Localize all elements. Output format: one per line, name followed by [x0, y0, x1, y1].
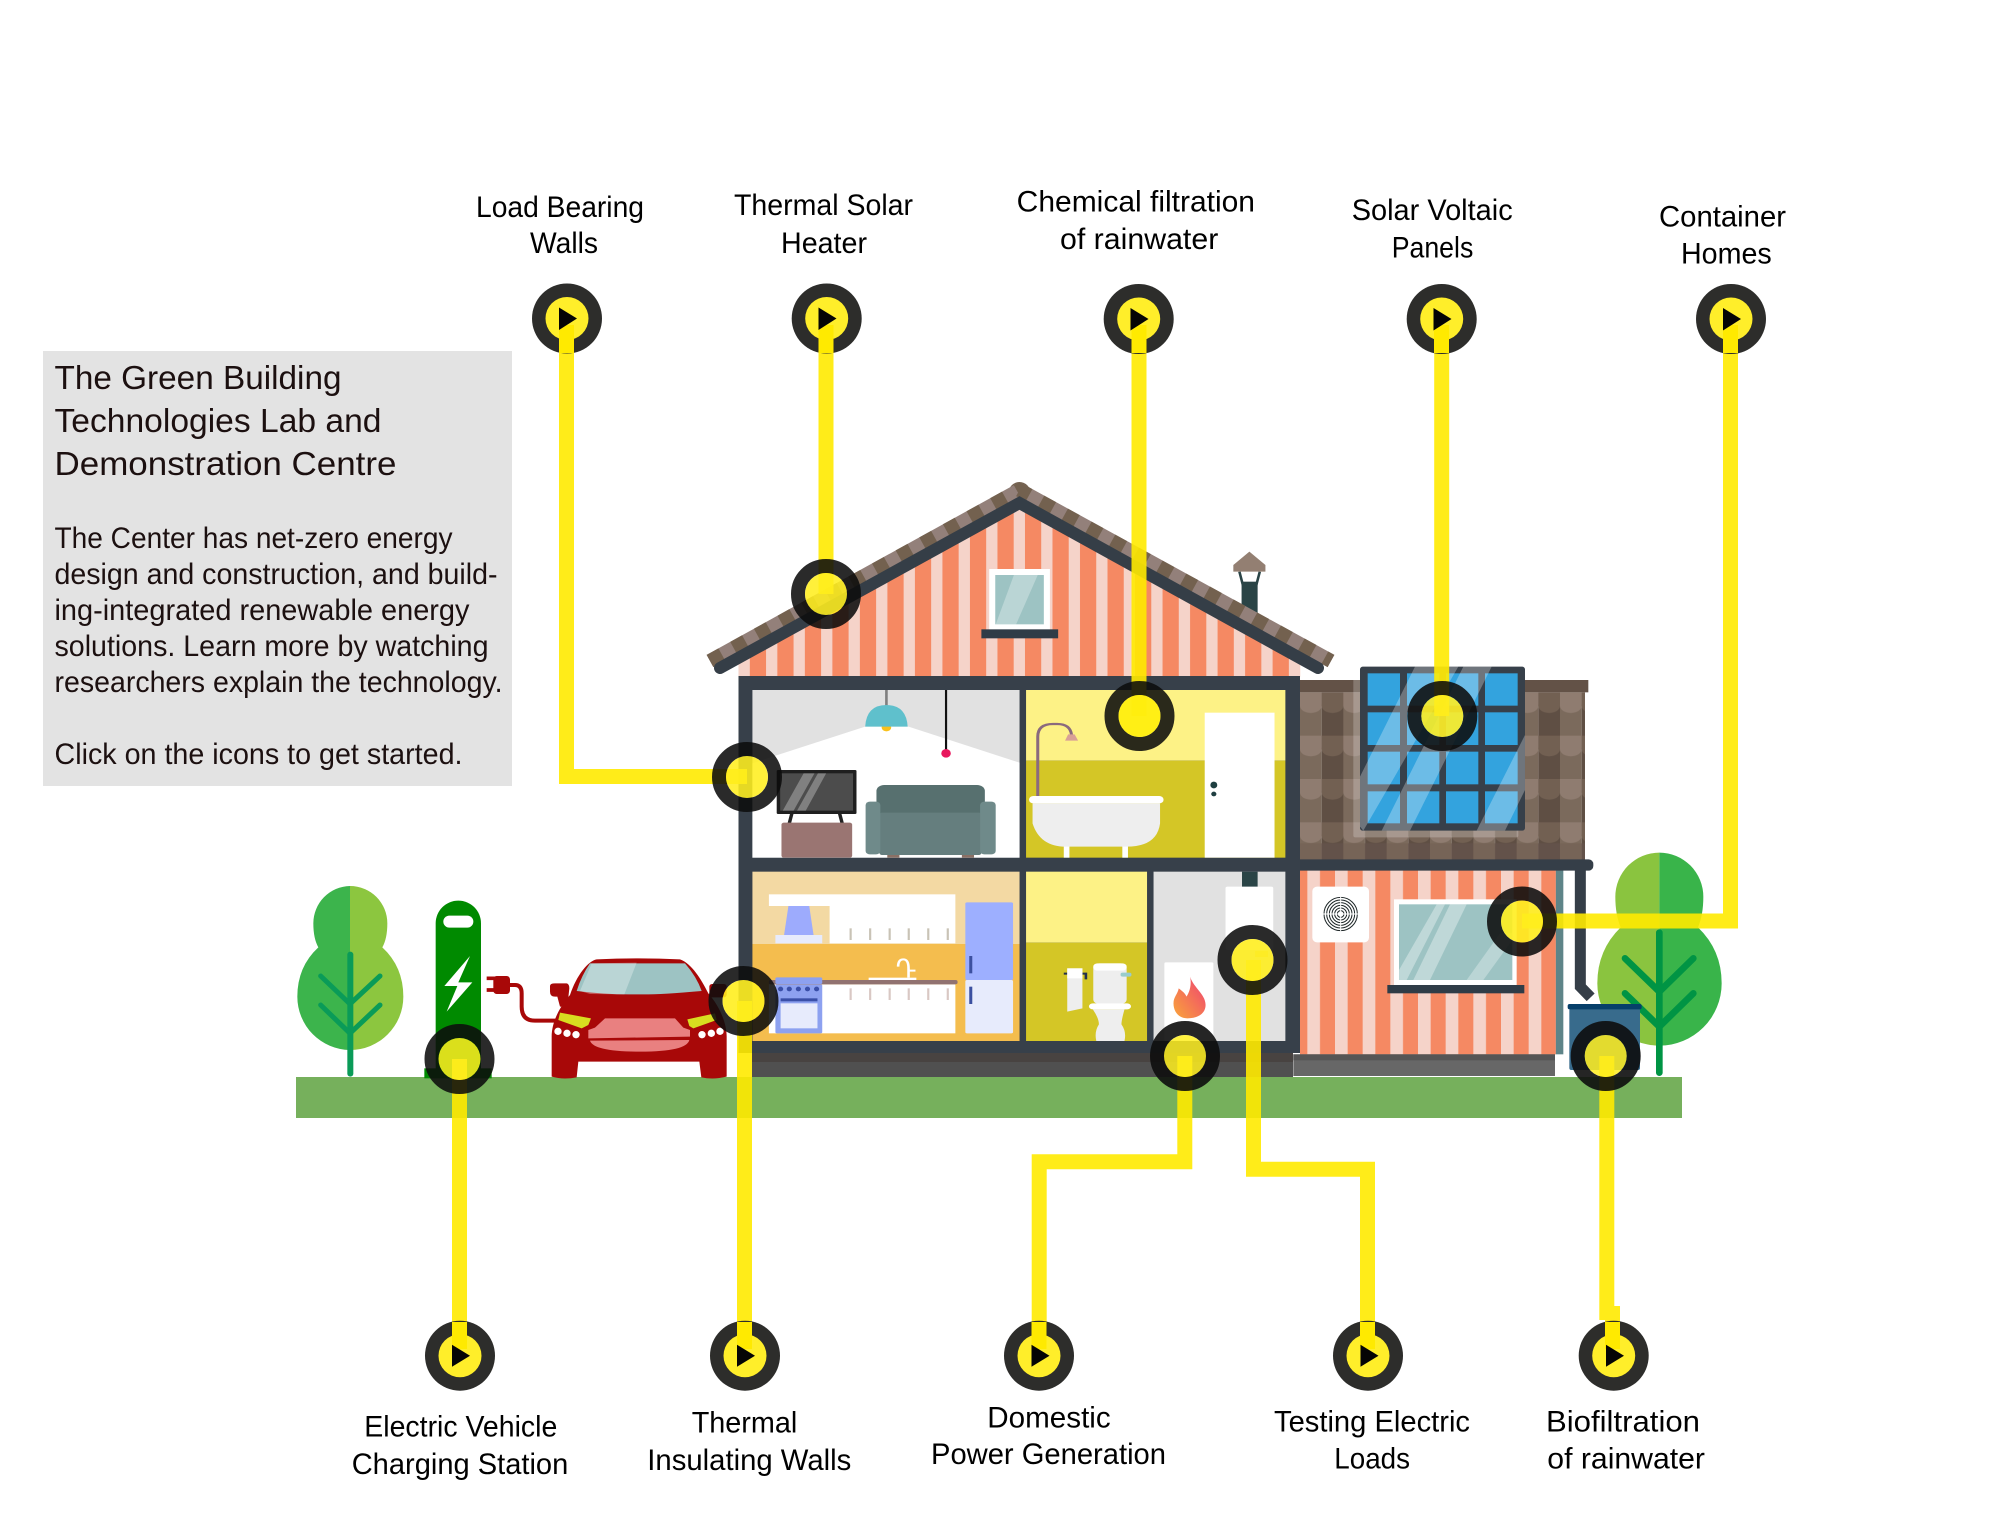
label: testing electric loads: Loads	[1334, 1442, 1410, 1475]
play button: chemical filtration	[1104, 284, 1174, 354]
pendant	[941, 690, 951, 758]
foundation	[1293, 1054, 1555, 1076]
solar panels	[1353, 667, 1525, 837]
room: kitchen	[752, 872, 1020, 1041]
label: testing electric loads	[1274, 1406, 1470, 1475]
connector: testing electric loads	[1254, 960, 1368, 1350]
play button: domestic power generation	[1004, 1321, 1074, 1391]
connector: chemical filtration	[1132, 325, 1146, 716]
hotspot: chemical filtration	[1112, 688, 1168, 744]
connector: thermal insulating walls	[737, 1001, 752, 1350]
bathtub	[1029, 796, 1164, 858]
stove	[775, 977, 822, 1033]
striped wall	[1300, 870, 1563, 1054]
gable wall	[739, 507, 1300, 677]
room: bathroom	[1026, 690, 1285, 858]
icon: right tree	[1597, 853, 1722, 1076]
ground	[296, 1077, 1682, 1118]
roof tiles	[710, 482, 1331, 661]
house frame	[738, 676, 1300, 1077]
play button: thermal insulating walls	[710, 1321, 780, 1391]
room: living room	[752, 690, 1020, 858]
label: chemical filtration	[1017, 186, 1255, 256]
connector: solar voltaic panels	[1434, 325, 1449, 716]
panel body text	[54, 522, 502, 771]
hotspot: EV station	[432, 1031, 488, 1087]
television	[777, 770, 856, 858]
range hood	[775, 906, 822, 943]
label: biofiltration of rainwater	[1546, 1406, 1705, 1475]
tiled roof	[1300, 680, 1588, 860]
window	[1387, 899, 1524, 993]
play button: load bearing walls	[532, 284, 602, 354]
shower	[1038, 724, 1078, 796]
room: toilet	[1026, 872, 1147, 1041]
panel body text: The Center has net-zero energy	[54, 522, 453, 555]
panel body text: Click on the icons to get started.	[54, 738, 462, 771]
label: load bearing walls: Load Bearing	[476, 191, 644, 224]
label: container homes	[1659, 201, 1786, 270]
label: biofiltration of rainwater: Biofiltration	[1546, 1406, 1700, 1439]
label: biofiltration of rainwater: of rainwater	[1547, 1442, 1705, 1475]
label: thermal insulating walls: Thermal	[692, 1407, 797, 1440]
icon: EV charging station	[424, 901, 557, 1078]
toilet	[1089, 963, 1131, 1041]
connector: thermal solar heater	[818, 325, 834, 594]
label: electric vehicle charging station: Charging Station	[352, 1448, 568, 1481]
hotspot: domestic power	[1157, 1028, 1213, 1084]
icon: left tree	[297, 886, 403, 1077]
play button: biofiltration	[1579, 1321, 1649, 1391]
panel body text: design and construction, and build-	[54, 558, 498, 591]
play button: container homes	[1696, 284, 1766, 354]
label: load bearing walls	[476, 191, 644, 260]
label: domestic power generation	[931, 1401, 1166, 1471]
icon: air vent	[1312, 887, 1369, 942]
connector: biofiltration	[1607, 1056, 1612, 1345]
label: thermal solar heater: Thermal Solar	[734, 189, 913, 222]
label: chemical filtration: Chemical filtration	[1017, 186, 1255, 219]
hotspot: thermal solar	[798, 566, 854, 622]
panel body text: solutions. Learn more by watching	[54, 630, 488, 663]
door	[1205, 713, 1275, 858]
label: testing electric loads: Testing Electric	[1274, 1406, 1470, 1439]
hotspot: solar panels	[1414, 688, 1470, 744]
roof outline	[720, 503, 1318, 668]
hotspot: testing electric loads	[1224, 932, 1280, 988]
panel body text: researchers explain the technology.	[54, 666, 502, 699]
toilet paper	[1064, 968, 1086, 1012]
icon: rainwater bin	[1568, 1004, 1642, 1070]
hotspot: biofiltration	[1578, 1028, 1634, 1084]
panel heading	[54, 360, 396, 483]
label: electric vehicle charging station: Electric Vehicle	[364, 1411, 557, 1444]
play button: testing electric loads	[1333, 1321, 1403, 1391]
gable window	[981, 569, 1058, 638]
label: container homes: Container	[1659, 201, 1786, 234]
label: thermal solar heater: Heater	[781, 227, 867, 260]
connector: EV station	[452, 1059, 467, 1350]
upper cabinets	[769, 894, 955, 943]
label: electric vehicle charging station	[352, 1411, 568, 1481]
panel body text: ing-integrated renewable energy	[54, 594, 470, 627]
ceiling lamp	[865, 690, 908, 731]
label: domestic power generation: Power Generation	[931, 1438, 1166, 1471]
play button: solar voltaic panels	[1407, 284, 1477, 354]
info panel	[43, 351, 512, 786]
label: solar voltaic panels	[1352, 194, 1513, 264]
chimney	[1233, 552, 1265, 615]
room: mechanical room	[1154, 872, 1285, 1041]
label: thermal solar heater	[734, 189, 913, 260]
icon: red car	[550, 958, 727, 1079]
play button: EV station	[425, 1321, 495, 1391]
hotspot: thermal insulating	[716, 973, 772, 1029]
label: domestic power generation: Domestic	[987, 1401, 1111, 1434]
panel heading: Demonstration Centre	[54, 446, 396, 483]
gutter and downpipe	[1280, 859, 1593, 997]
water heater	[1226, 872, 1273, 957]
fridge	[965, 902, 1013, 1033]
label: thermal insulating walls	[647, 1407, 851, 1477]
boiler with flame	[1164, 962, 1213, 1041]
hotspot: container homes	[1494, 894, 1550, 950]
connector: domestic power generation	[1039, 1056, 1185, 1350]
panel heading: The Green Building	[54, 360, 342, 397]
panel heading: Technologies Lab and	[54, 403, 382, 440]
label: container homes: Homes	[1681, 237, 1772, 270]
label: solar voltaic panels: Solar Voltaic	[1352, 194, 1513, 227]
play button: thermal solar heater	[792, 284, 862, 354]
sofa	[866, 785, 996, 858]
connector: container homes	[1522, 325, 1730, 921]
label: solar voltaic panels: Panels	[1392, 231, 1473, 264]
label: chemical filtration: of rainwater	[1060, 223, 1218, 256]
label: load bearing walls: Walls	[530, 227, 598, 260]
lower cabinets and counter	[769, 959, 958, 1033]
connector: load bearing walls	[566, 325, 747, 776]
label: thermal insulating walls: Insulating Walls	[647, 1444, 851, 1477]
right wing of house	[1280, 667, 1593, 1076]
hotspot: load bearing	[719, 749, 775, 805]
